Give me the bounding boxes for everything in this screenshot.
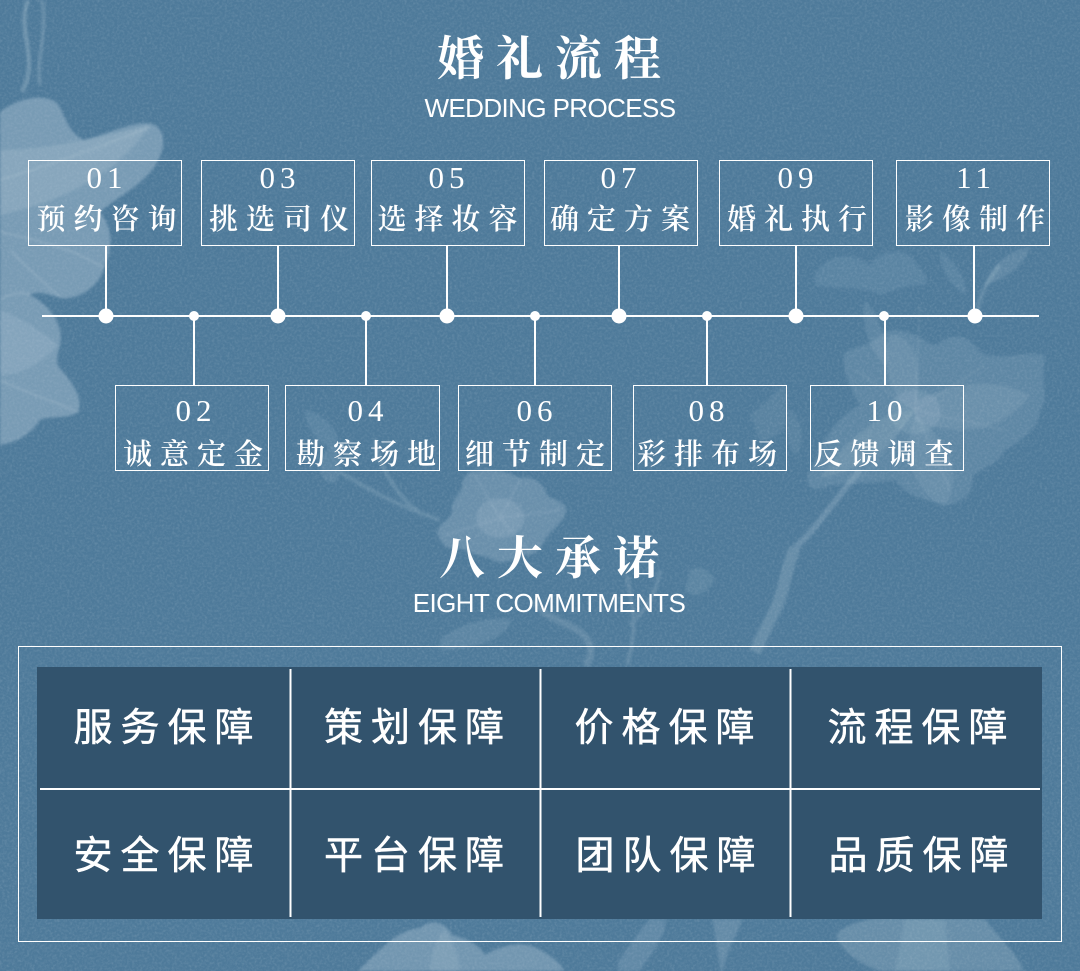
title: wedding process xyxy=(424,34,676,123)
centre flower stems and leaves xyxy=(340,440,440,520)
step 07: 07 xyxy=(600,160,642,195)
step 03: 03 xyxy=(260,160,300,195)
subtitle: eight commitments: EIGHT COMMITMENTS xyxy=(413,588,685,618)
step 02: 02 xyxy=(176,393,216,428)
step 08: 08 xyxy=(688,393,730,428)
panel: commitments xyxy=(18,646,1062,942)
leaves left of hibiscus xyxy=(750,385,787,440)
timeline small nodes xyxy=(189,311,889,321)
step 10 xyxy=(810,386,964,471)
step 05: 选择妆容 xyxy=(377,203,526,236)
step 09: 婚礼执行 xyxy=(727,203,875,236)
step 04: 04 xyxy=(348,393,388,428)
step 01 xyxy=(28,160,185,246)
step 04: 勘察场地 xyxy=(296,438,444,471)
floral background: centre flower xyxy=(305,410,715,665)
cell: safety: 安全保障 xyxy=(73,835,262,878)
step 06 xyxy=(458,386,613,471)
floral background: bottom flowers xyxy=(358,918,1024,971)
step 08: 彩排布场 xyxy=(637,438,785,471)
table grid lines xyxy=(40,669,1040,917)
floral background: right hibiscus xyxy=(750,247,1045,652)
step 09: 09 xyxy=(778,160,818,195)
step 08 xyxy=(634,386,786,471)
step 01: 01 xyxy=(86,160,128,195)
outer frame xyxy=(18,646,1062,942)
timeline axis xyxy=(42,315,1039,317)
timeline connectors xyxy=(106,245,974,385)
step 07 xyxy=(544,160,698,246)
step 03 xyxy=(202,160,357,246)
step 04 xyxy=(286,386,444,471)
step 07: 确定方案 xyxy=(550,203,698,236)
timeline large nodes xyxy=(98,308,982,324)
title: eight commitments xyxy=(413,533,685,618)
step 10: 反馈调查 xyxy=(813,438,962,471)
cell: planning: 策划保障 xyxy=(324,707,512,750)
step 06: 06 xyxy=(516,393,558,428)
right flower stem xyxy=(795,470,860,548)
title: eight commitments: 八大承诺 xyxy=(439,533,671,584)
cell: quality: 品质保障 xyxy=(828,835,1017,878)
step 02: 诚意定金 xyxy=(123,437,271,471)
cell: service: 服务保障 xyxy=(73,707,262,750)
step 11 xyxy=(896,160,1053,246)
step 11: 11 xyxy=(956,160,996,195)
table background xyxy=(37,667,1042,919)
step 11: 影像制作 xyxy=(905,203,1053,236)
step 10: 10 xyxy=(866,393,908,428)
step 05: 05 xyxy=(428,160,470,195)
cell: platform: 平台保障 xyxy=(324,835,512,878)
title: wedding process: 婚礼流程 xyxy=(437,34,673,86)
step 05 xyxy=(372,160,526,246)
cell: price: 价格保障 xyxy=(574,707,763,750)
floral background: left flower xyxy=(0,0,163,445)
upper leaves xyxy=(815,252,926,295)
timeline xyxy=(42,245,1039,385)
step 03: 挑选司仪 xyxy=(209,203,357,236)
step 02 xyxy=(116,386,271,471)
step 01: 预约咨询 xyxy=(36,203,185,236)
subtitle: wedding process: WEDDING PROCESS xyxy=(424,93,676,123)
cell: team: 团队保障 xyxy=(575,835,764,878)
cell: process: 流程保障 xyxy=(827,707,1016,750)
step 06: 细节制定 xyxy=(465,437,613,471)
step 09 xyxy=(720,160,875,246)
